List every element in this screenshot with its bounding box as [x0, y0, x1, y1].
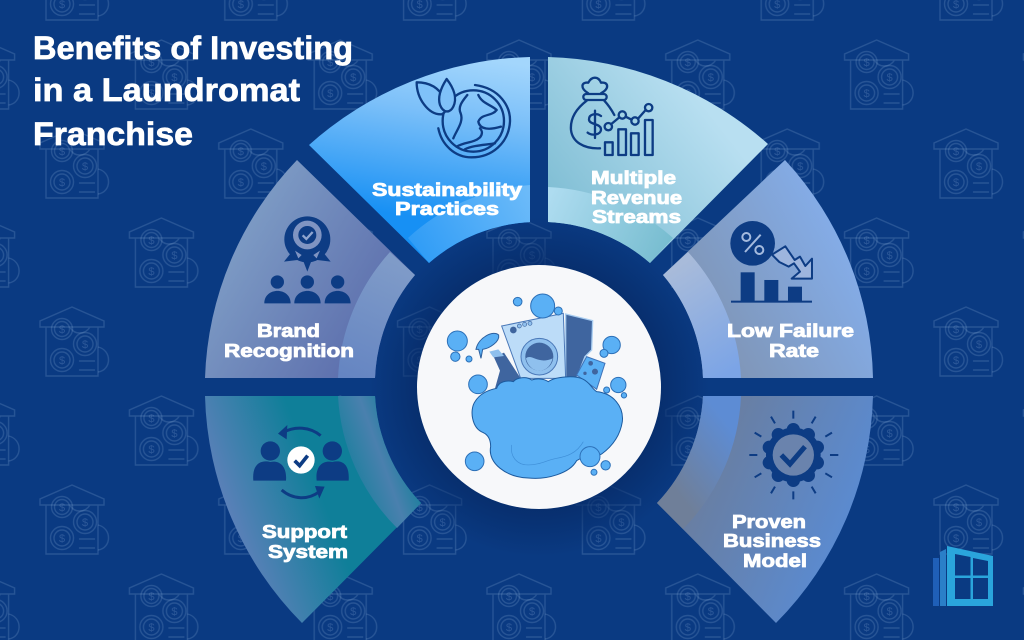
icon: globe with leaves — [417, 79, 510, 157]
label: Rate — [769, 341, 819, 361]
label: Practices — [395, 199, 499, 219]
label: Business — [723, 531, 821, 551]
label — [224, 321, 354, 361]
label: Brand — [257, 321, 320, 341]
panel: multiple revenue streams — [548, 57, 768, 263]
title: Franchise — [33, 116, 193, 152]
centre white circle with laundry illustration — [417, 265, 661, 509]
panel: support system — [205, 396, 421, 623]
panel: low failure rate — [663, 160, 873, 378]
label: Model — [743, 551, 807, 571]
label — [727, 321, 854, 361]
label — [372, 180, 522, 219]
title: Benefits of Investing — [33, 30, 353, 66]
label: Low Failure — [727, 321, 854, 341]
icon: award rosette above people — [264, 216, 351, 303]
label: Sustainability — [372, 180, 522, 200]
logo: window mark — [933, 546, 993, 606]
label — [262, 522, 348, 562]
label: Revenue — [591, 188, 682, 208]
icon: badge with check and rays — [749, 411, 838, 499]
label: System — [268, 542, 348, 562]
panel: sustainability practices — [309, 57, 530, 263]
panel: proven business model — [657, 396, 873, 623]
icon: percent with falling arrow and bars — [730, 221, 812, 303]
title — [33, 30, 353, 152]
icon: money bag and chart — [571, 78, 653, 155]
title: in a Laundromat — [33, 72, 300, 108]
icon: two people with check and cycle arrows — [253, 425, 349, 499]
shadow ring around centre — [369, 217, 709, 557]
label: Recognition — [224, 341, 354, 361]
label: Streams — [592, 207, 681, 227]
label: Multiple — [591, 168, 676, 188]
label: Support — [262, 522, 347, 542]
label — [723, 512, 821, 571]
label: Proven — [732, 512, 806, 532]
illustration: washer, bottle, sponge, foam and bubbles — [447, 294, 627, 478]
label — [591, 168, 682, 227]
panel: brand recognition — [205, 160, 415, 378]
